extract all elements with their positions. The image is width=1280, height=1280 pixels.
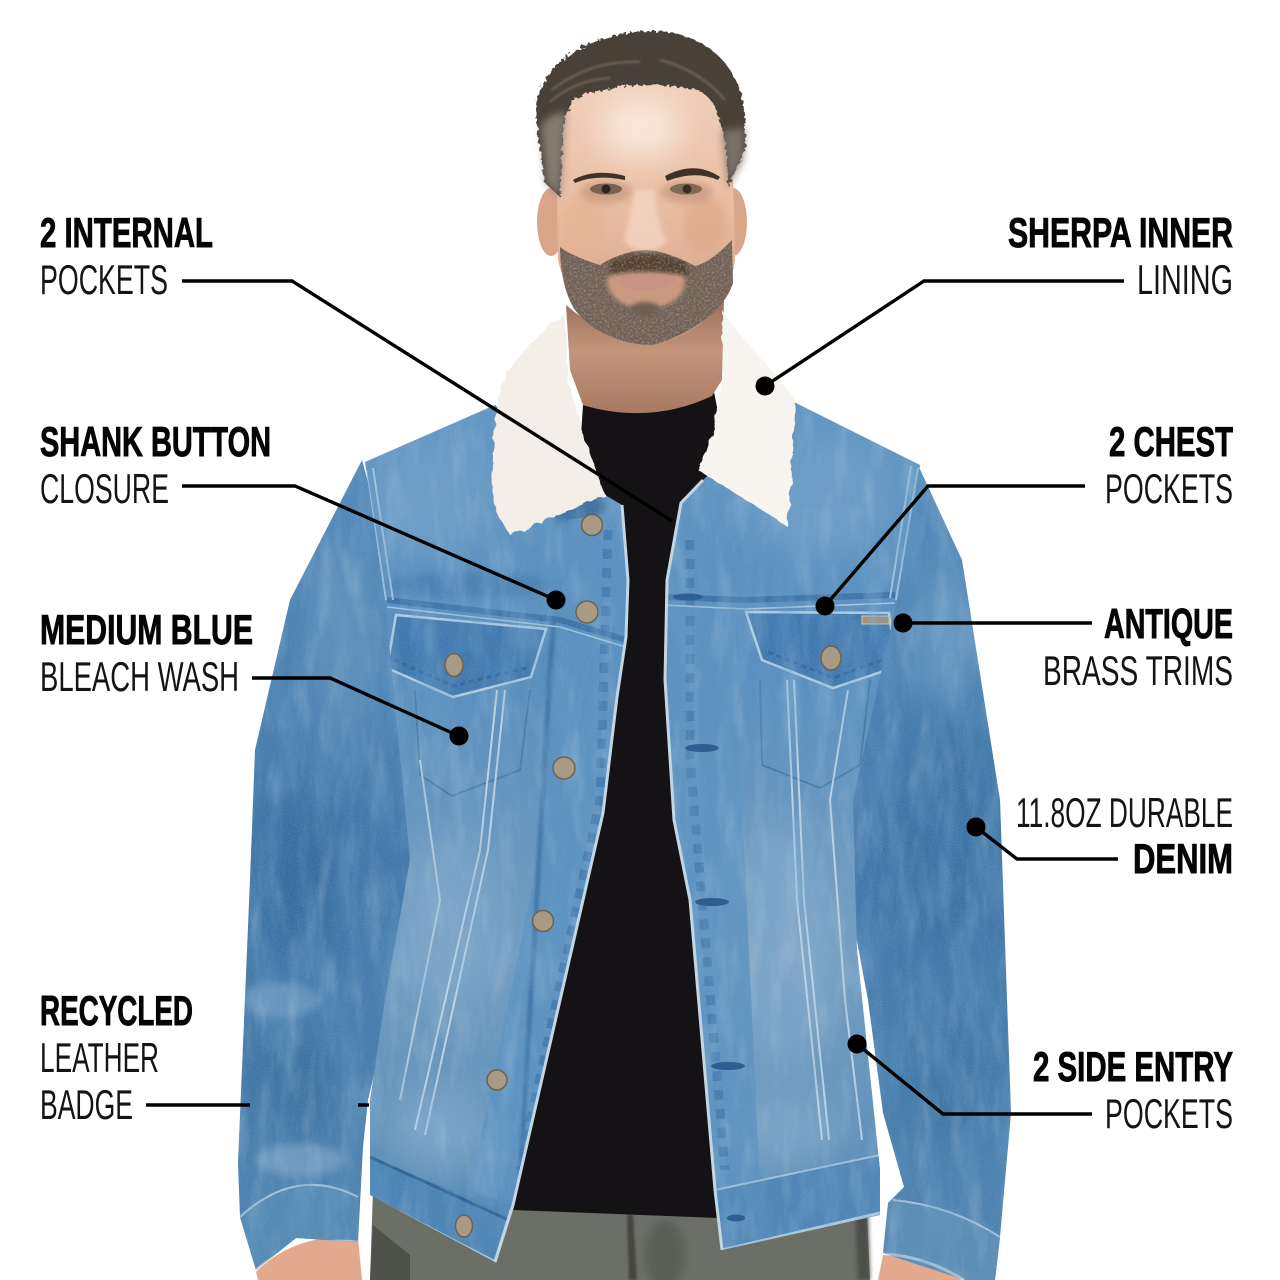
brass plaque <box>862 616 889 624</box>
callout: medium blue bleach wash: MEDIUM BLUE <box>40 606 253 653</box>
hair highlights <box>550 60 725 102</box>
soul patch <box>630 302 660 316</box>
callout: medium blue bleach wash: BLEACH WASH <box>40 653 239 700</box>
yoke seam <box>665 595 895 600</box>
eye sockets <box>580 181 632 203</box>
callout: medium blue bleach wash <box>40 606 468 746</box>
chin skin below mouth <box>607 272 685 309</box>
callout: shank button closure <box>40 418 566 610</box>
sherpa collar left <box>493 315 605 535</box>
yoke seam <box>387 600 626 640</box>
callout: sherpa inner lining: LINING <box>1137 256 1233 303</box>
head <box>537 31 747 350</box>
callout: 2 chest pockets <box>816 418 1233 616</box>
callout: recycled leather badge <box>40 987 369 1128</box>
jacket right front panel <box>660 395 930 1255</box>
callout: 2 internal pockets: POCKETS <box>40 256 168 303</box>
placket light edges <box>495 480 722 1262</box>
shoulder seam <box>366 468 393 600</box>
right hand <box>878 1255 962 1280</box>
callout: sherpa inner lining <box>756 209 1233 396</box>
callout: 2 internal pockets <box>40 209 672 521</box>
hair <box>537 31 745 197</box>
callout: recycled leather badge: BADGE <box>40 1081 133 1128</box>
callout: recycled leather badge: LEATHER <box>40 1034 159 1081</box>
jacket left front panel <box>360 400 640 1270</box>
placket strip <box>680 809 759 1171</box>
jacket buttons <box>445 514 841 1237</box>
forehead highlight <box>598 98 682 158</box>
callout: 2 side entry pockets <box>848 1034 1233 1137</box>
placket strip <box>476 514 602 1202</box>
pocket stitching <box>760 680 870 788</box>
sherpa collar right <box>698 310 795 526</box>
buttonholes <box>673 594 745 1222</box>
callout: 11.8oz durable denim: DENIM <box>1133 835 1233 882</box>
black t-shirt <box>513 392 760 1218</box>
left sleeve <box>238 460 410 1270</box>
nose <box>624 190 667 250</box>
callout: 11.8oz durable denim <box>966 789 1233 882</box>
pocket flap <box>746 612 896 688</box>
waistband <box>370 1159 500 1214</box>
waistband <box>719 1156 880 1222</box>
eyes <box>590 184 622 194</box>
left hand <box>256 1237 362 1280</box>
right sleeve <box>853 468 1011 1280</box>
eyebrows <box>573 173 625 183</box>
pocket flap <box>387 615 546 697</box>
trousers <box>370 1190 870 1280</box>
ears <box>537 188 565 256</box>
face <box>556 75 735 345</box>
callout: shank button closure: CLOSURE <box>40 465 169 512</box>
neck <box>566 300 724 413</box>
grey temples <box>541 112 566 197</box>
person wearing sherpa-lined denim jacket <box>230 31 1020 1280</box>
cheek shading <box>563 195 607 255</box>
pocket stitching <box>415 690 530 796</box>
beard <box>560 240 733 345</box>
callout: antique brass trims <box>894 600 1233 694</box>
callout: 2 internal pockets: 2 INTERNAL <box>40 209 213 256</box>
callout: recycled leather badge: RECYCLED <box>40 987 193 1034</box>
denim wash texture <box>230 390 1020 1280</box>
shoulder seam <box>890 466 918 600</box>
lips <box>615 274 680 291</box>
callout: shank button closure: SHANK BUTTON <box>40 418 271 465</box>
